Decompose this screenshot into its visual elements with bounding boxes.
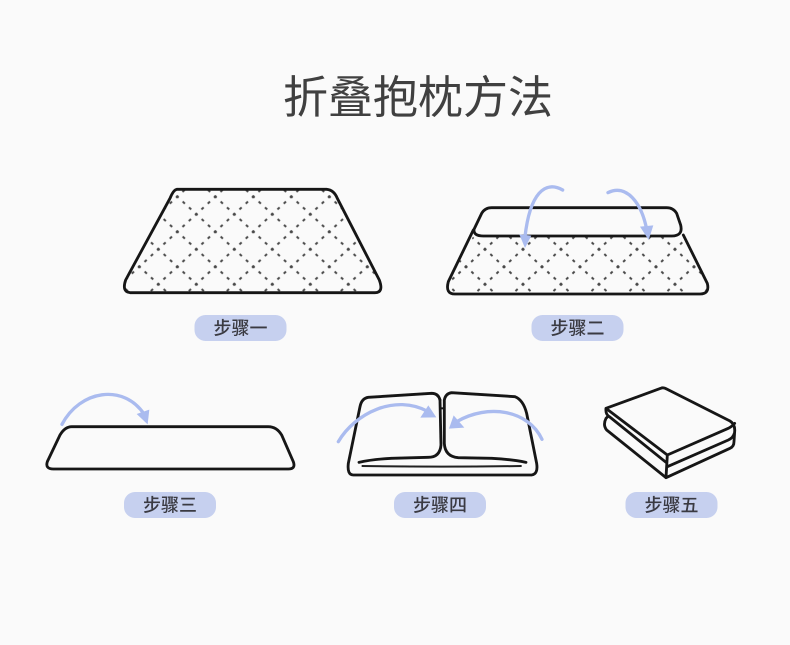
arrow: left fold — [519, 187, 563, 248]
step two label: 步骤二 — [550, 318, 604, 338]
arrow: right fold — [608, 190, 653, 240]
step two label — [532, 315, 624, 341]
step one label — [194, 315, 286, 341]
arrow: from left — [338, 405, 436, 442]
illustration: blanket with top edge folded — [447, 187, 708, 294]
illustration: flat quilted pillow blanket — [124, 189, 381, 293]
title: 折叠抱枕方法 — [283, 72, 553, 123]
illustration: finished folded stack — [604, 388, 735, 478]
arrow: fold over — [62, 394, 149, 424]
illustration: two sides folded to centre — [338, 393, 542, 475]
panel: step two — [447, 187, 708, 341]
step one label: 步骤一 — [214, 318, 268, 338]
step three label: 步骤三 — [143, 496, 197, 516]
illustration: folded strip — [47, 394, 294, 469]
panel: step three — [47, 394, 294, 518]
step five label: 步骤五 — [644, 496, 698, 516]
panel: step four — [338, 393, 542, 518]
step three label — [124, 492, 216, 518]
step four label: 步骤四 — [413, 496, 467, 516]
arrow: from right — [449, 411, 542, 439]
panel: step one — [124, 189, 381, 341]
step four label — [394, 492, 486, 518]
panel: step five — [604, 388, 735, 518]
